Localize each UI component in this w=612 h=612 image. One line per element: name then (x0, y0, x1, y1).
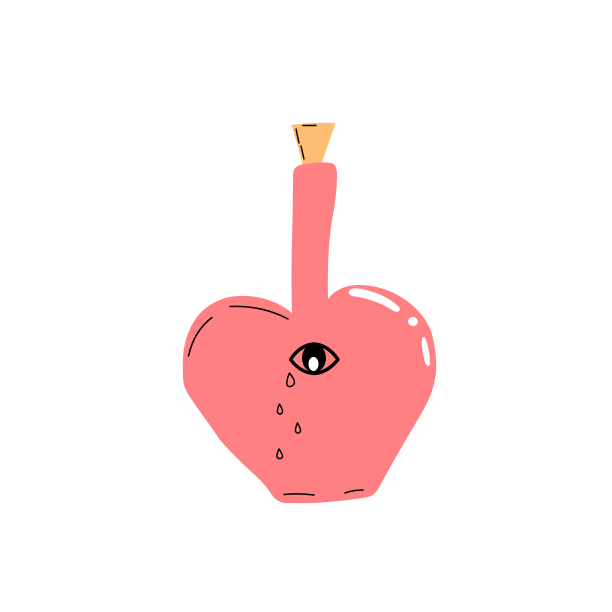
highlight: glass shine (349, 288, 430, 366)
icon: crying eye (290, 344, 338, 374)
icon: cork stopper (292, 123, 336, 166)
outline strokes: body contour accents (188, 306, 363, 495)
icon: tear drops (277, 373, 301, 459)
bottle body: heart and neck (183, 162, 436, 503)
